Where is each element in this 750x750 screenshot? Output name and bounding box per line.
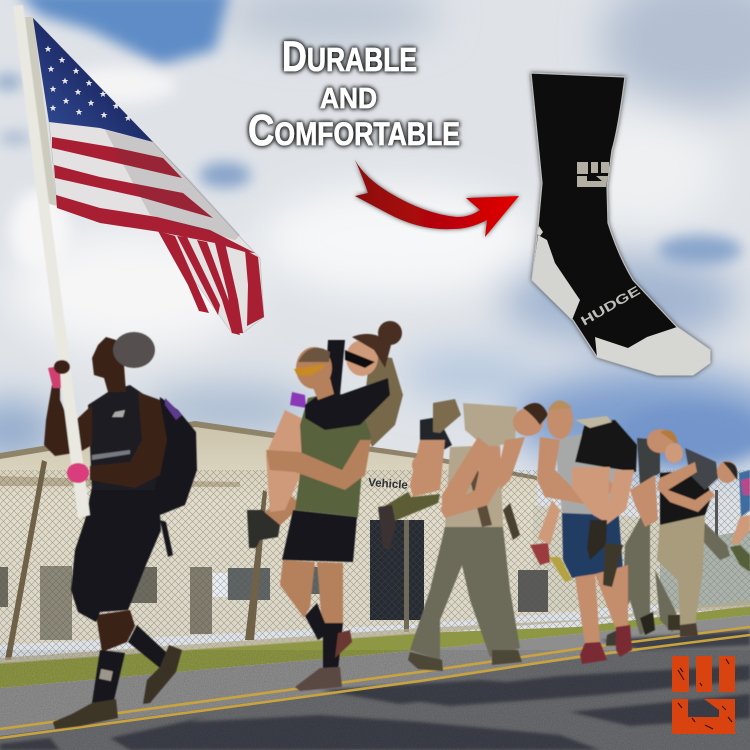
window middle [228,568,270,600]
grass [0,606,750,688]
road [0,615,750,750]
canton [33,18,153,142]
pink wrap upper [48,366,61,388]
line: comfortable: COMFORTABLE [248,106,460,155]
red stripes [52,137,264,335]
far right shoe [730,545,750,572]
rider arm over [442,437,490,515]
carrier right arm [440,443,502,518]
orange head [647,429,673,453]
window far left [0,567,8,607]
rider shoe [378,505,396,550]
rider thigh [410,440,445,497]
head [547,401,573,439]
dark bay door [370,520,424,620]
title [248,33,460,155]
rider camo pack [362,355,403,447]
second rider leg [538,500,560,545]
tan pants [657,513,705,627]
rider tan shirt [575,416,612,428]
straps [503,503,520,540]
head [92,337,126,392]
back shoe [143,645,182,704]
purple top [290,392,306,408]
shorts [282,510,357,562]
near arm [90,392,167,488]
stars [45,46,131,121]
arms clasped [266,440,371,490]
logo base [672,699,735,734]
rider sunglasses [345,350,375,368]
rider thighs [572,467,610,523]
product sock [531,73,710,375]
carrier face [665,443,683,463]
sign [213,573,227,597]
tank body [555,430,618,515]
flag shade [105,130,240,240]
raised arm [44,385,80,456]
backpack [153,397,197,515]
blue shorts [562,505,623,578]
back sock [128,625,167,668]
rider body sleeve [305,340,390,430]
rider shorts [575,420,637,472]
sock brand text: HUDGE [578,282,643,329]
american flag [25,17,264,335]
sock body [531,73,710,375]
brand logo [672,656,735,734]
shoulders [537,437,615,505]
second rider shoes [530,543,550,565]
camo legs [702,520,730,560]
grey bay [518,570,548,612]
window right [305,567,320,594]
far right person [739,470,750,517]
rider hair [352,334,391,368]
line: and: AND [320,83,377,115]
door middle [190,567,212,634]
front shoe [53,699,118,729]
door left [40,566,72,640]
man shirt [295,392,371,517]
legs [280,560,315,618]
rider shoes [587,520,607,560]
man neck [312,378,334,400]
back leg skin [96,610,135,652]
carrier shirt [445,445,503,527]
rider face [346,340,378,376]
rider shirt [463,403,517,447]
man in tank carrying man in black shorts [530,400,655,664]
socks [305,603,329,640]
black shirt [660,470,712,525]
leggings [71,487,161,622]
rider grey shirt [685,448,718,490]
logo bars [672,656,689,692]
building sign text: Vehicle [368,477,408,492]
far boots [640,612,655,635]
background sky with clouds [0,0,750,560]
red shoes [580,642,607,664]
building [0,421,660,645]
carrier cap [433,399,461,433]
sock heel [532,235,580,320]
road yellow lines [0,627,750,738]
sock logo [577,162,609,187]
legs [575,574,600,645]
arm [630,475,658,527]
hanging shoe and leg [260,495,302,530]
hand on pole [54,360,70,374]
man sunglasses [294,364,326,376]
rider shorts [420,417,452,452]
rider head [513,408,543,436]
rider torso [637,438,660,485]
arms [657,462,715,512]
boots [680,623,698,637]
boots [408,652,443,671]
person: man in green shirt with woman on back [247,321,403,691]
shoes [335,630,352,658]
camo pants [410,527,520,660]
men at rear of the line [630,429,750,637]
chain-link fence [0,460,750,660]
soldier carrying man in tan shirt [378,399,548,671]
flag pole [13,5,90,518]
sock toe [595,327,710,375]
rider thigh [266,410,305,512]
rider head [717,461,737,483]
torso [88,385,160,490]
line: durable: DURABLE [282,33,417,81]
window left [130,567,157,603]
person: woman carrying flag [13,5,197,729]
red arrow [355,160,519,237]
far person camo legs [622,500,653,635]
front sock [92,650,125,703]
pink glove [67,463,89,483]
man head [296,347,332,389]
hand on thigh [412,456,426,474]
rider lower leg in olive socks [383,492,413,522]
beanie [113,332,155,368]
